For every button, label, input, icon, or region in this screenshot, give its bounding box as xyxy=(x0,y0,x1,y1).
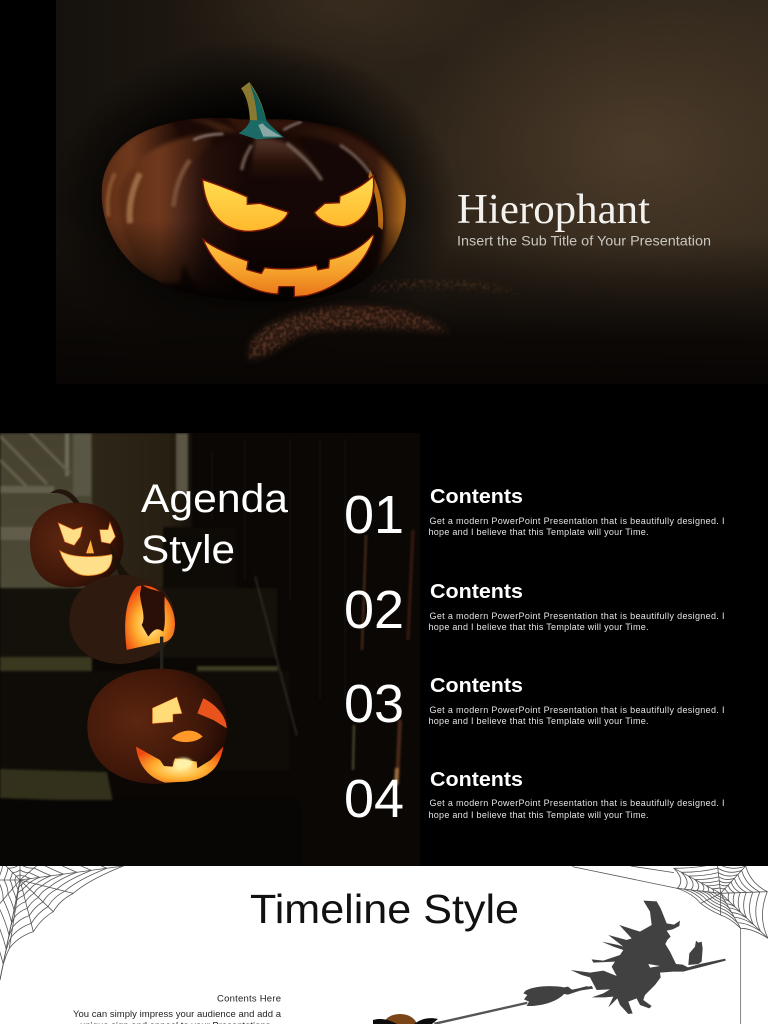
agenda item 01: 01 xyxy=(344,485,404,545)
steps xyxy=(0,588,277,658)
agenda item 04: Contents xyxy=(430,769,523,791)
agenda photo of pumpkins on steps xyxy=(0,433,420,866)
agenda item 03: 03 xyxy=(344,674,404,734)
agenda item 02: 02 xyxy=(344,580,404,640)
top pumpkin xyxy=(30,489,123,587)
agenda item 01: Contents xyxy=(430,486,523,508)
agenda item 04: Get a modern PowerPoint Presentation that is beautifully designed. I xyxy=(430,798,724,808)
agenda item 04: 04 xyxy=(344,769,404,829)
agenda item 03 xyxy=(344,674,724,734)
agenda heading: Agenda xyxy=(141,477,289,521)
agenda item 03: Get a modern PowerPoint Presentation that is beautifully designed. I xyxy=(430,705,724,715)
witch silhouette xyxy=(570,901,726,1014)
slide 2: agenda background xyxy=(0,433,768,866)
middle pumpkin xyxy=(69,543,175,664)
icon: right spider web with thread xyxy=(572,863,768,1024)
title: Hierophant: Hierophant xyxy=(457,187,650,233)
agenda item 03: Contents xyxy=(430,675,523,697)
icon: left spider web xyxy=(0,866,124,980)
agenda heading xyxy=(141,477,289,572)
agenda item 01 xyxy=(344,485,724,545)
pumpkin highlights xyxy=(108,122,370,223)
slide 3: timeline background xyxy=(0,866,768,1024)
right eye xyxy=(315,177,373,226)
door and wall xyxy=(0,433,92,593)
agenda item 02 xyxy=(344,580,724,640)
agenda item 03: hope and I believe that this Template will your Time. xyxy=(428,716,648,726)
agenda item 02: Get a modern PowerPoint Presentation that is beautifully designed. I xyxy=(430,611,724,621)
timeline text block: You can simply impress your audience and add a xyxy=(73,1009,282,1020)
timeline text block: Contents Here xyxy=(217,994,281,1004)
pumpkin body xyxy=(102,118,406,285)
agenda item 02: Contents xyxy=(430,581,523,603)
agenda item 01: Get a modern PowerPoint Presentation that is beautifully designed. I xyxy=(430,516,724,526)
pumpkin stem xyxy=(239,82,284,139)
left eye xyxy=(203,181,287,231)
agenda item 04 xyxy=(344,769,724,829)
subtitle: Insert the Sub Title of Your Presentation xyxy=(457,232,711,248)
agenda heading: Style xyxy=(141,528,235,572)
icon: witch on broomstick with cat xyxy=(434,901,726,1024)
agenda item 01: hope and I believe that this Template will your Time. xyxy=(428,527,648,537)
pumpkin illustration xyxy=(93,82,413,310)
wood streaks xyxy=(254,529,416,786)
broom stick and head xyxy=(434,986,588,1024)
agenda item 04: hope and I believe that this Template will your Time. xyxy=(428,810,648,820)
title: Timeline Style: Timeline Style xyxy=(250,886,519,932)
icon: bat and moon at bottom of timeline xyxy=(373,1014,438,1024)
slide 1: title background photo xyxy=(47,0,768,384)
timeline text block xyxy=(73,994,282,1024)
bottom pumpkin xyxy=(87,637,227,784)
mouth xyxy=(205,235,373,296)
agenda item 02: hope and I believe that this Template will your Time. xyxy=(428,622,648,632)
